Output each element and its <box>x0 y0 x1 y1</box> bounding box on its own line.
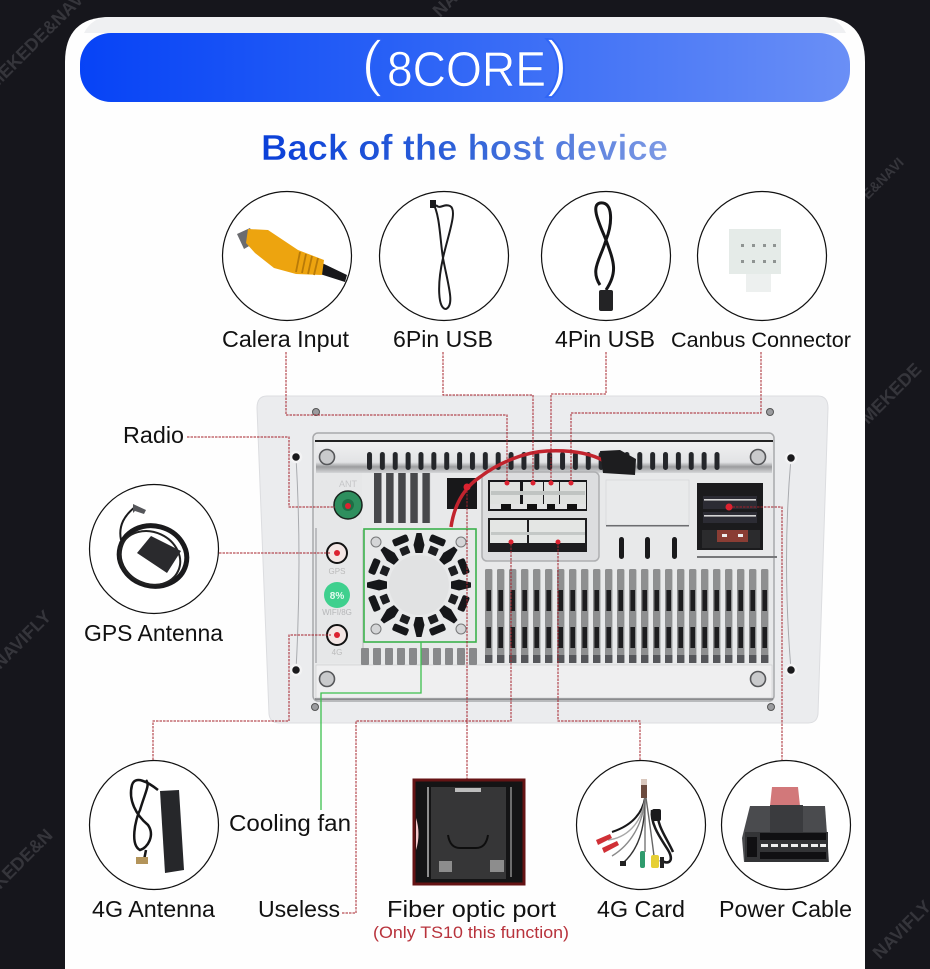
label: Only TS10 note: (Only TS10 this function) <box>373 923 569 942</box>
jack: 4G <box>327 625 347 657</box>
card top band <box>84 17 846 33</box>
top connectors <box>488 480 587 511</box>
line: cooling fan <box>321 642 421 810</box>
main vent grid <box>485 569 773 663</box>
badge: WIFI 8G <box>322 582 352 617</box>
line: power cable <box>729 507 782 760</box>
label: Useless: Useless <box>258 896 340 922</box>
panel: host device back <box>257 396 828 723</box>
label: Radio: Radio <box>123 422 184 448</box>
jack: GPS <box>327 543 347 576</box>
cooling fan <box>364 529 476 642</box>
banner title: ( <box>361 29 383 98</box>
left jack panel <box>315 473 362 663</box>
label: Calera Input: Calera Input <box>222 326 350 352</box>
label: 4Pin USB: 4Pin USB <box>555 326 655 352</box>
icon: canbus connector <box>698 192 826 320</box>
icon: power cable connector <box>722 760 850 890</box>
connection dots <box>334 480 732 638</box>
icon: 4 pin USB cable <box>542 192 670 320</box>
label: Power Cable: Power Cable <box>719 896 852 922</box>
black connector square <box>447 478 477 509</box>
small vents <box>374 473 434 523</box>
line: 4g card <box>558 542 640 760</box>
blank panel <box>606 480 689 525</box>
bottom band <box>316 665 772 698</box>
badge: WIFI 8G: 8% <box>330 591 344 602</box>
icon: camera RCA plug <box>222 192 352 320</box>
connector lines <box>153 352 782 913</box>
slots <box>619 537 677 559</box>
line: radio <box>187 437 335 507</box>
red wire <box>451 451 604 527</box>
label: 4G Antenna: 4G Antenna <box>92 896 215 922</box>
label: 4G Card: 4G Card <box>597 896 685 922</box>
icon: 4G antenna <box>90 760 218 890</box>
icon: 4G card wiring harness <box>576 760 706 890</box>
line: fiber optic <box>466 487 468 780</box>
badge: WIFI 8G: WIFI/8G <box>322 608 352 617</box>
icon: fiber optic port photo <box>414 780 524 884</box>
bottom connectors <box>488 518 587 552</box>
line: gps <box>219 552 331 554</box>
banner <box>80 29 850 102</box>
banner title: ) <box>546 29 568 98</box>
chassis body <box>313 433 774 701</box>
icon: GPS antenna <box>90 484 218 614</box>
line: useless <box>342 542 511 913</box>
line: 6pin usb <box>443 352 533 483</box>
label: Canbus Connector: Canbus Connector <box>671 329 851 352</box>
connector housing <box>482 472 599 561</box>
watermarks: MEKEDE <box>857 359 925 428</box>
jack: ANT radio: ANT <box>339 479 358 489</box>
line: 4g antenna <box>153 635 331 760</box>
power connector socket <box>697 483 763 550</box>
jack: GPS: GPS <box>329 567 345 576</box>
banner title: 8CORE <box>387 43 546 97</box>
screws and holes <box>291 408 796 710</box>
icon: 6 pin USB cable <box>380 192 508 320</box>
plate <box>257 396 828 723</box>
jack: ANT radio <box>334 479 362 519</box>
label: Cooling fan: Cooling fan <box>229 810 351 836</box>
panel seam <box>697 556 777 558</box>
line: camera input <box>286 352 507 483</box>
label: Fiber optic port: Fiber optic port <box>387 896 557 922</box>
top vent band <box>316 442 772 473</box>
wire plug <box>600 450 636 475</box>
heading: Back of the host device <box>261 127 668 168</box>
label: 6Pin USB: 6Pin USB <box>393 326 493 352</box>
watermarks: E&NAVI <box>859 154 907 202</box>
jack: 4G: 4G <box>332 648 342 657</box>
banner title <box>361 29 568 98</box>
label: GPS Antenna: GPS Antenna <box>84 620 223 646</box>
vents under fan <box>361 648 479 665</box>
line: canbus <box>571 352 761 483</box>
line: 4pin usb <box>551 352 606 483</box>
